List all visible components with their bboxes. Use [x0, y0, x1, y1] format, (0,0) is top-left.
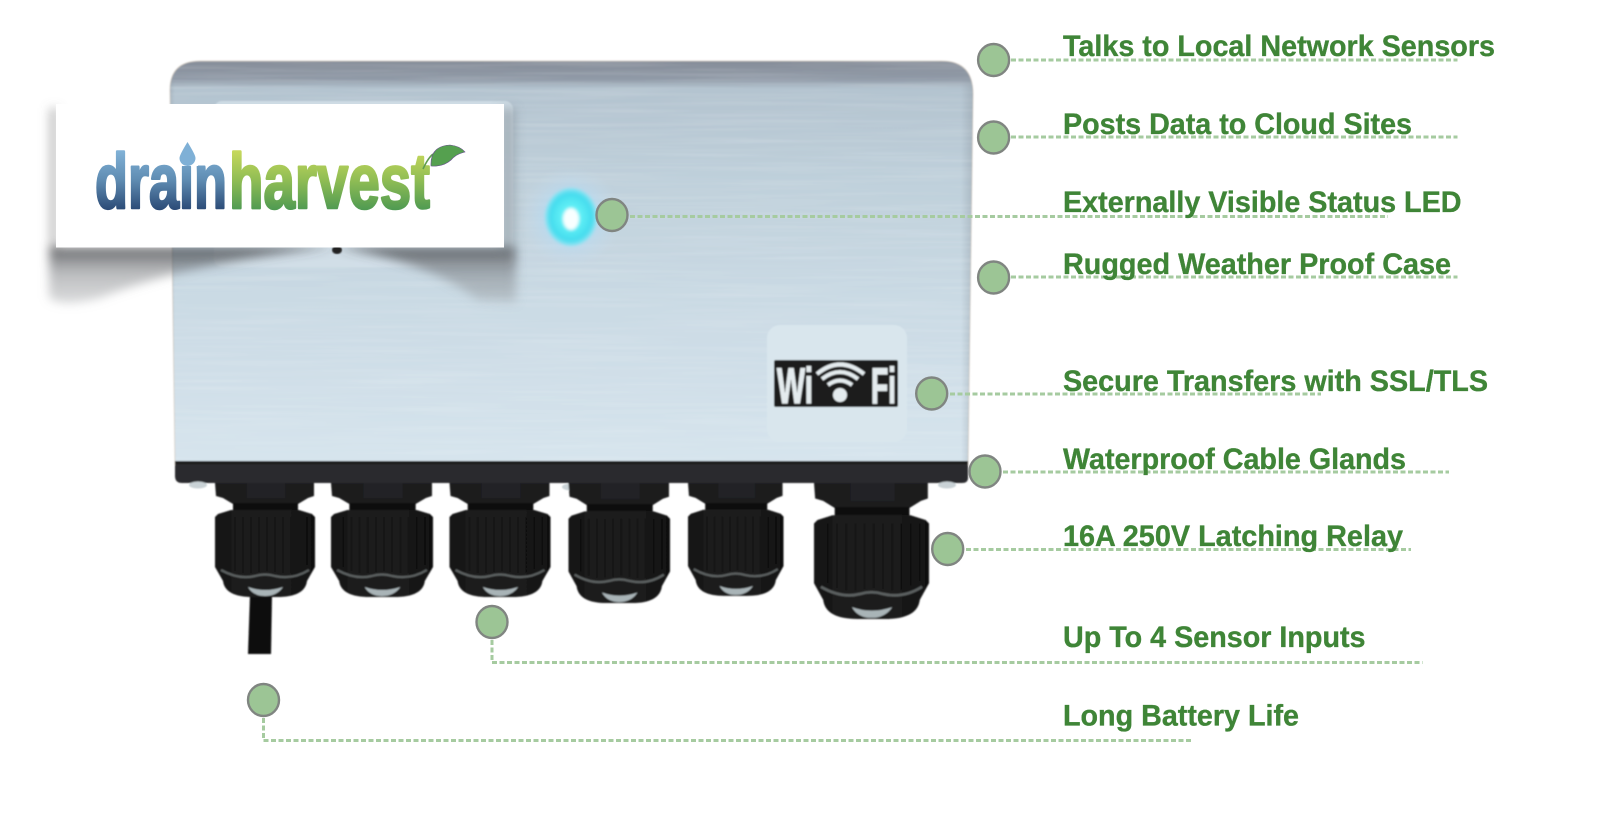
icon: leaf [423, 145, 465, 169]
logo card [56, 104, 504, 248]
callout: secure transfers: Secure Transfers with SSL/TLS [1063, 365, 1488, 398]
wifi sticker: Wi [777, 358, 813, 414]
cable gland 6 [814, 483, 929, 619]
logo wordmark: drain [95, 137, 227, 225]
callout: latching relay: 16A 250V Latching Relay [1063, 520, 1404, 553]
glowing status LED [521, 167, 621, 267]
cable gland 4 [568, 483, 670, 603]
callout: latching relay [932, 520, 1411, 565]
wifi sticker: Fi [871, 358, 896, 414]
cable gland 3 [450, 483, 550, 597]
callout: externally visible status LED [596, 186, 1462, 231]
callout: externally visible status LED: Externally Visible Status LED [1063, 186, 1462, 219]
callout: posts data to cloud sites: Posts Data to Cloud Sites [1063, 108, 1412, 141]
callout: long battery life [248, 684, 1299, 740]
logo wordmark: harvest [229, 137, 430, 225]
cable gland 2 [331, 483, 433, 597]
black lid seal band [175, 461, 968, 483]
device photo illustration [170, 61, 973, 654]
callout: sensor inputs: Up To 4 Sensor Inputs [1063, 621, 1366, 654]
cable gland 1 [215, 483, 315, 597]
callout: posts data to cloud sites [978, 108, 1458, 154]
icon: water drop [178, 142, 198, 166]
callout: waterproof cable glands: Waterproof Cable Glands [1063, 443, 1406, 476]
callout: waterproof cable glands [970, 443, 1449, 488]
logo wordmark [95, 137, 430, 225]
callout: talks to local network sensors [978, 30, 1495, 76]
callout: sensor inputs [476, 606, 1422, 662]
callout: rugged weather proof case [978, 248, 1458, 294]
infographic canvas [42, 34, 1494, 742]
enclosure body [170, 61, 973, 465]
screws [189, 482, 956, 490]
callout: long battery life: Long Battery Life [1063, 700, 1299, 732]
black cable [248, 595, 272, 654]
cable gland 5 [688, 483, 784, 596]
callout: talks to local network sensors: Talks to Local Network Sensors [1063, 30, 1495, 63]
callout: secure transfers [916, 365, 1488, 410]
callout: rugged weather proof case: Rugged Weather Proof Case [1063, 248, 1451, 281]
label plate on enclosure [214, 101, 513, 267]
dark marking under logo [332, 246, 342, 254]
wifi sticker [767, 325, 907, 442]
logo shadow [49, 108, 516, 303]
